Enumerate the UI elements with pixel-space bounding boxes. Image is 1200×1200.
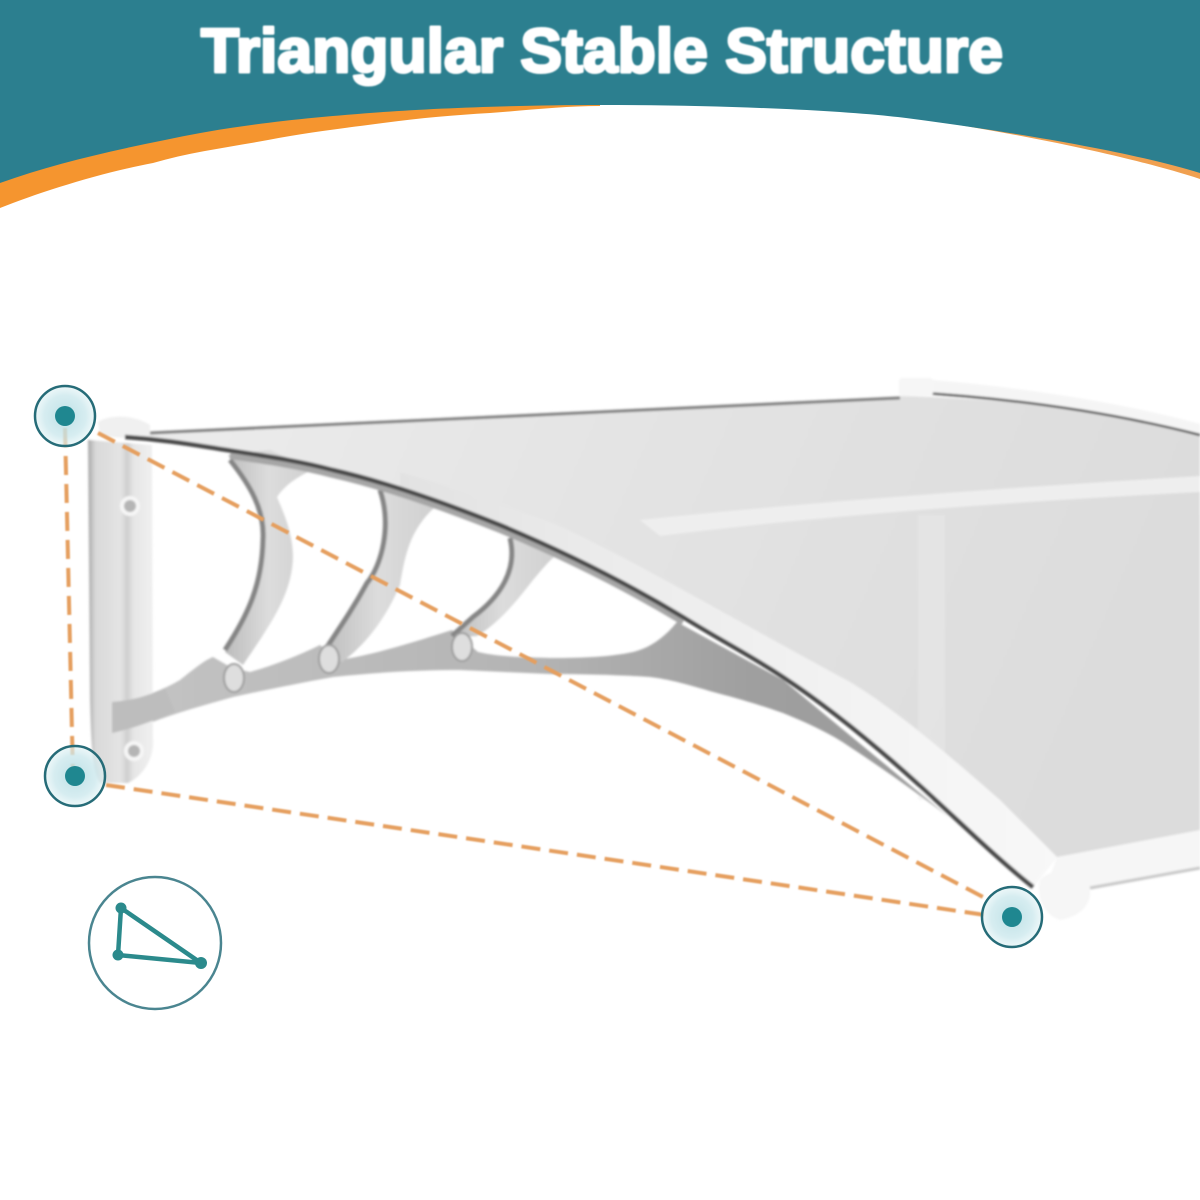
back end cap bbox=[899, 378, 933, 396]
lower strut bbox=[113, 622, 950, 818]
plate strut root bbox=[112, 688, 175, 733]
top bracket cap bbox=[98, 417, 150, 440]
title: Triangular Stable Structure bbox=[201, 17, 1003, 86]
back edge frame bbox=[905, 378, 1200, 436]
front end cap bbox=[1039, 871, 1090, 920]
right lower frame bbox=[1045, 830, 1200, 890]
strut bosses bbox=[224, 633, 472, 692]
anchor point: front tip bbox=[982, 887, 1042, 947]
orange right sliver bbox=[940, 118, 1200, 179]
rib 3 dark edge bbox=[452, 538, 512, 636]
rib 1 dark edge bbox=[225, 460, 263, 650]
rib 3 bbox=[450, 532, 555, 638]
back edge shadow line bbox=[908, 392, 1200, 435]
front edge soft shadow bbox=[230, 456, 683, 622]
header banner bbox=[0, 0, 1200, 208]
back edge line bbox=[150, 398, 900, 433]
rib 2 bbox=[322, 485, 434, 662]
orange accent swoosh bbox=[0, 90, 600, 208]
rib 2 dark edge bbox=[325, 490, 385, 650]
lower bracket screw hole bbox=[126, 743, 142, 759]
awning product illustration bbox=[88, 378, 1200, 920]
anchor point: bottom wall bbox=[45, 746, 105, 806]
icon: triangle in circle bbox=[89, 877, 221, 1009]
canopy panel bbox=[125, 396, 1200, 887]
panel light stripe bbox=[640, 476, 1200, 536]
right lower frame shadow bbox=[1090, 868, 1200, 888]
teal header band bbox=[0, 0, 1200, 183]
rib 1 bbox=[225, 450, 312, 665]
triangle dashed lines bbox=[65, 428, 985, 915]
anchor point: top wall bbox=[35, 386, 95, 446]
panel vertical seam bbox=[918, 515, 945, 800]
upper bracket screw hole bbox=[122, 498, 138, 514]
front frame band bbox=[400, 472, 1057, 887]
front dark edge bbox=[125, 437, 1033, 887]
wall bracket plate bbox=[88, 440, 153, 783]
